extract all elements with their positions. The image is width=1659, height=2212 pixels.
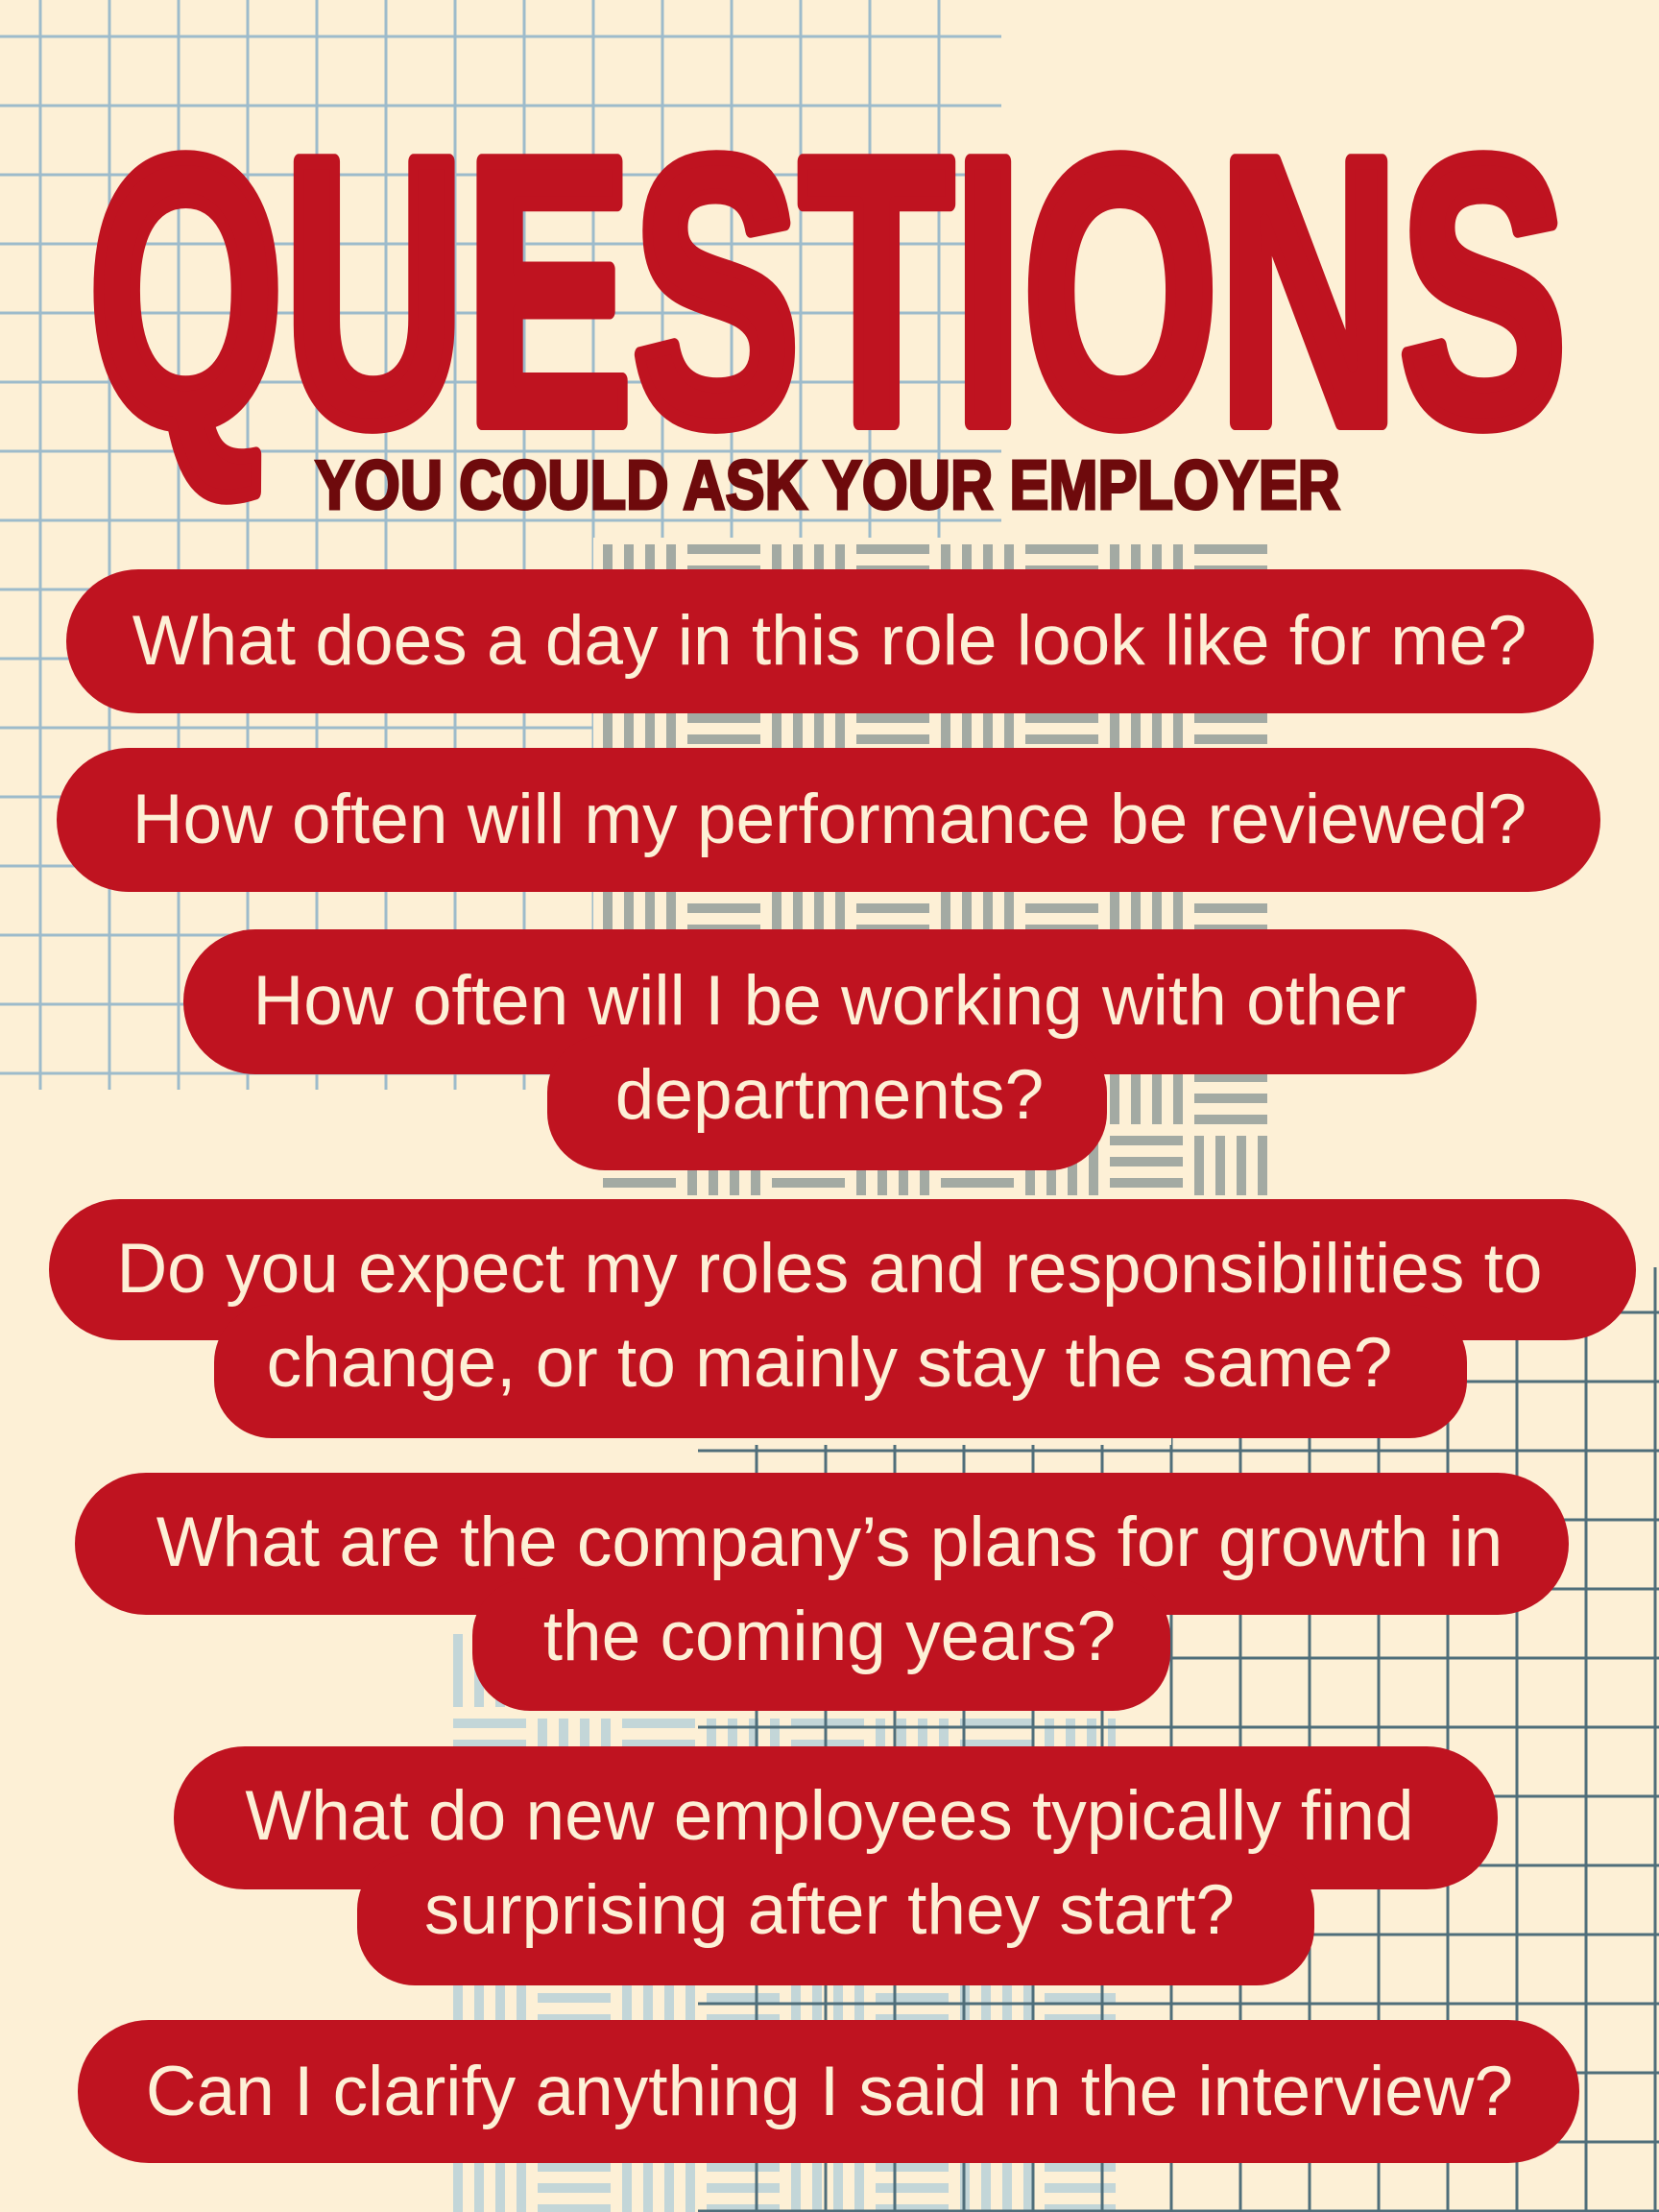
question 6: What do new employees typically find xyxy=(245,1777,1414,1855)
question 4 xyxy=(49,1199,1636,1438)
question 3: How often will I be working with other xyxy=(253,962,1406,1040)
subtitle: YOU COULD ASK YOUR EMPLOYER xyxy=(315,447,1340,524)
question 7: Can I clarify anything I said in the interview? xyxy=(146,2053,1513,2130)
question 7 xyxy=(78,2020,1579,2163)
question 3 xyxy=(183,929,1477,1170)
question 5 xyxy=(75,1473,1569,1711)
question 5: What are the company’s plans for growth in xyxy=(156,1503,1503,1581)
question 4: Do you expect my roles and responsibilities to xyxy=(116,1230,1543,1308)
question 2 xyxy=(57,748,1600,892)
question 1 xyxy=(66,569,1594,713)
question 6: surprising after they start? xyxy=(424,1871,1235,1949)
question 1: What does a day in this role look like for me? xyxy=(132,602,1527,680)
question 5: the coming years? xyxy=(543,1598,1116,1675)
question 6 xyxy=(174,1746,1498,1985)
question 2: How often will my performance be reviewed? xyxy=(132,781,1527,858)
question 4: change, or to mainly stay the same? xyxy=(267,1324,1392,1402)
question 3: departments? xyxy=(615,1056,1044,1134)
